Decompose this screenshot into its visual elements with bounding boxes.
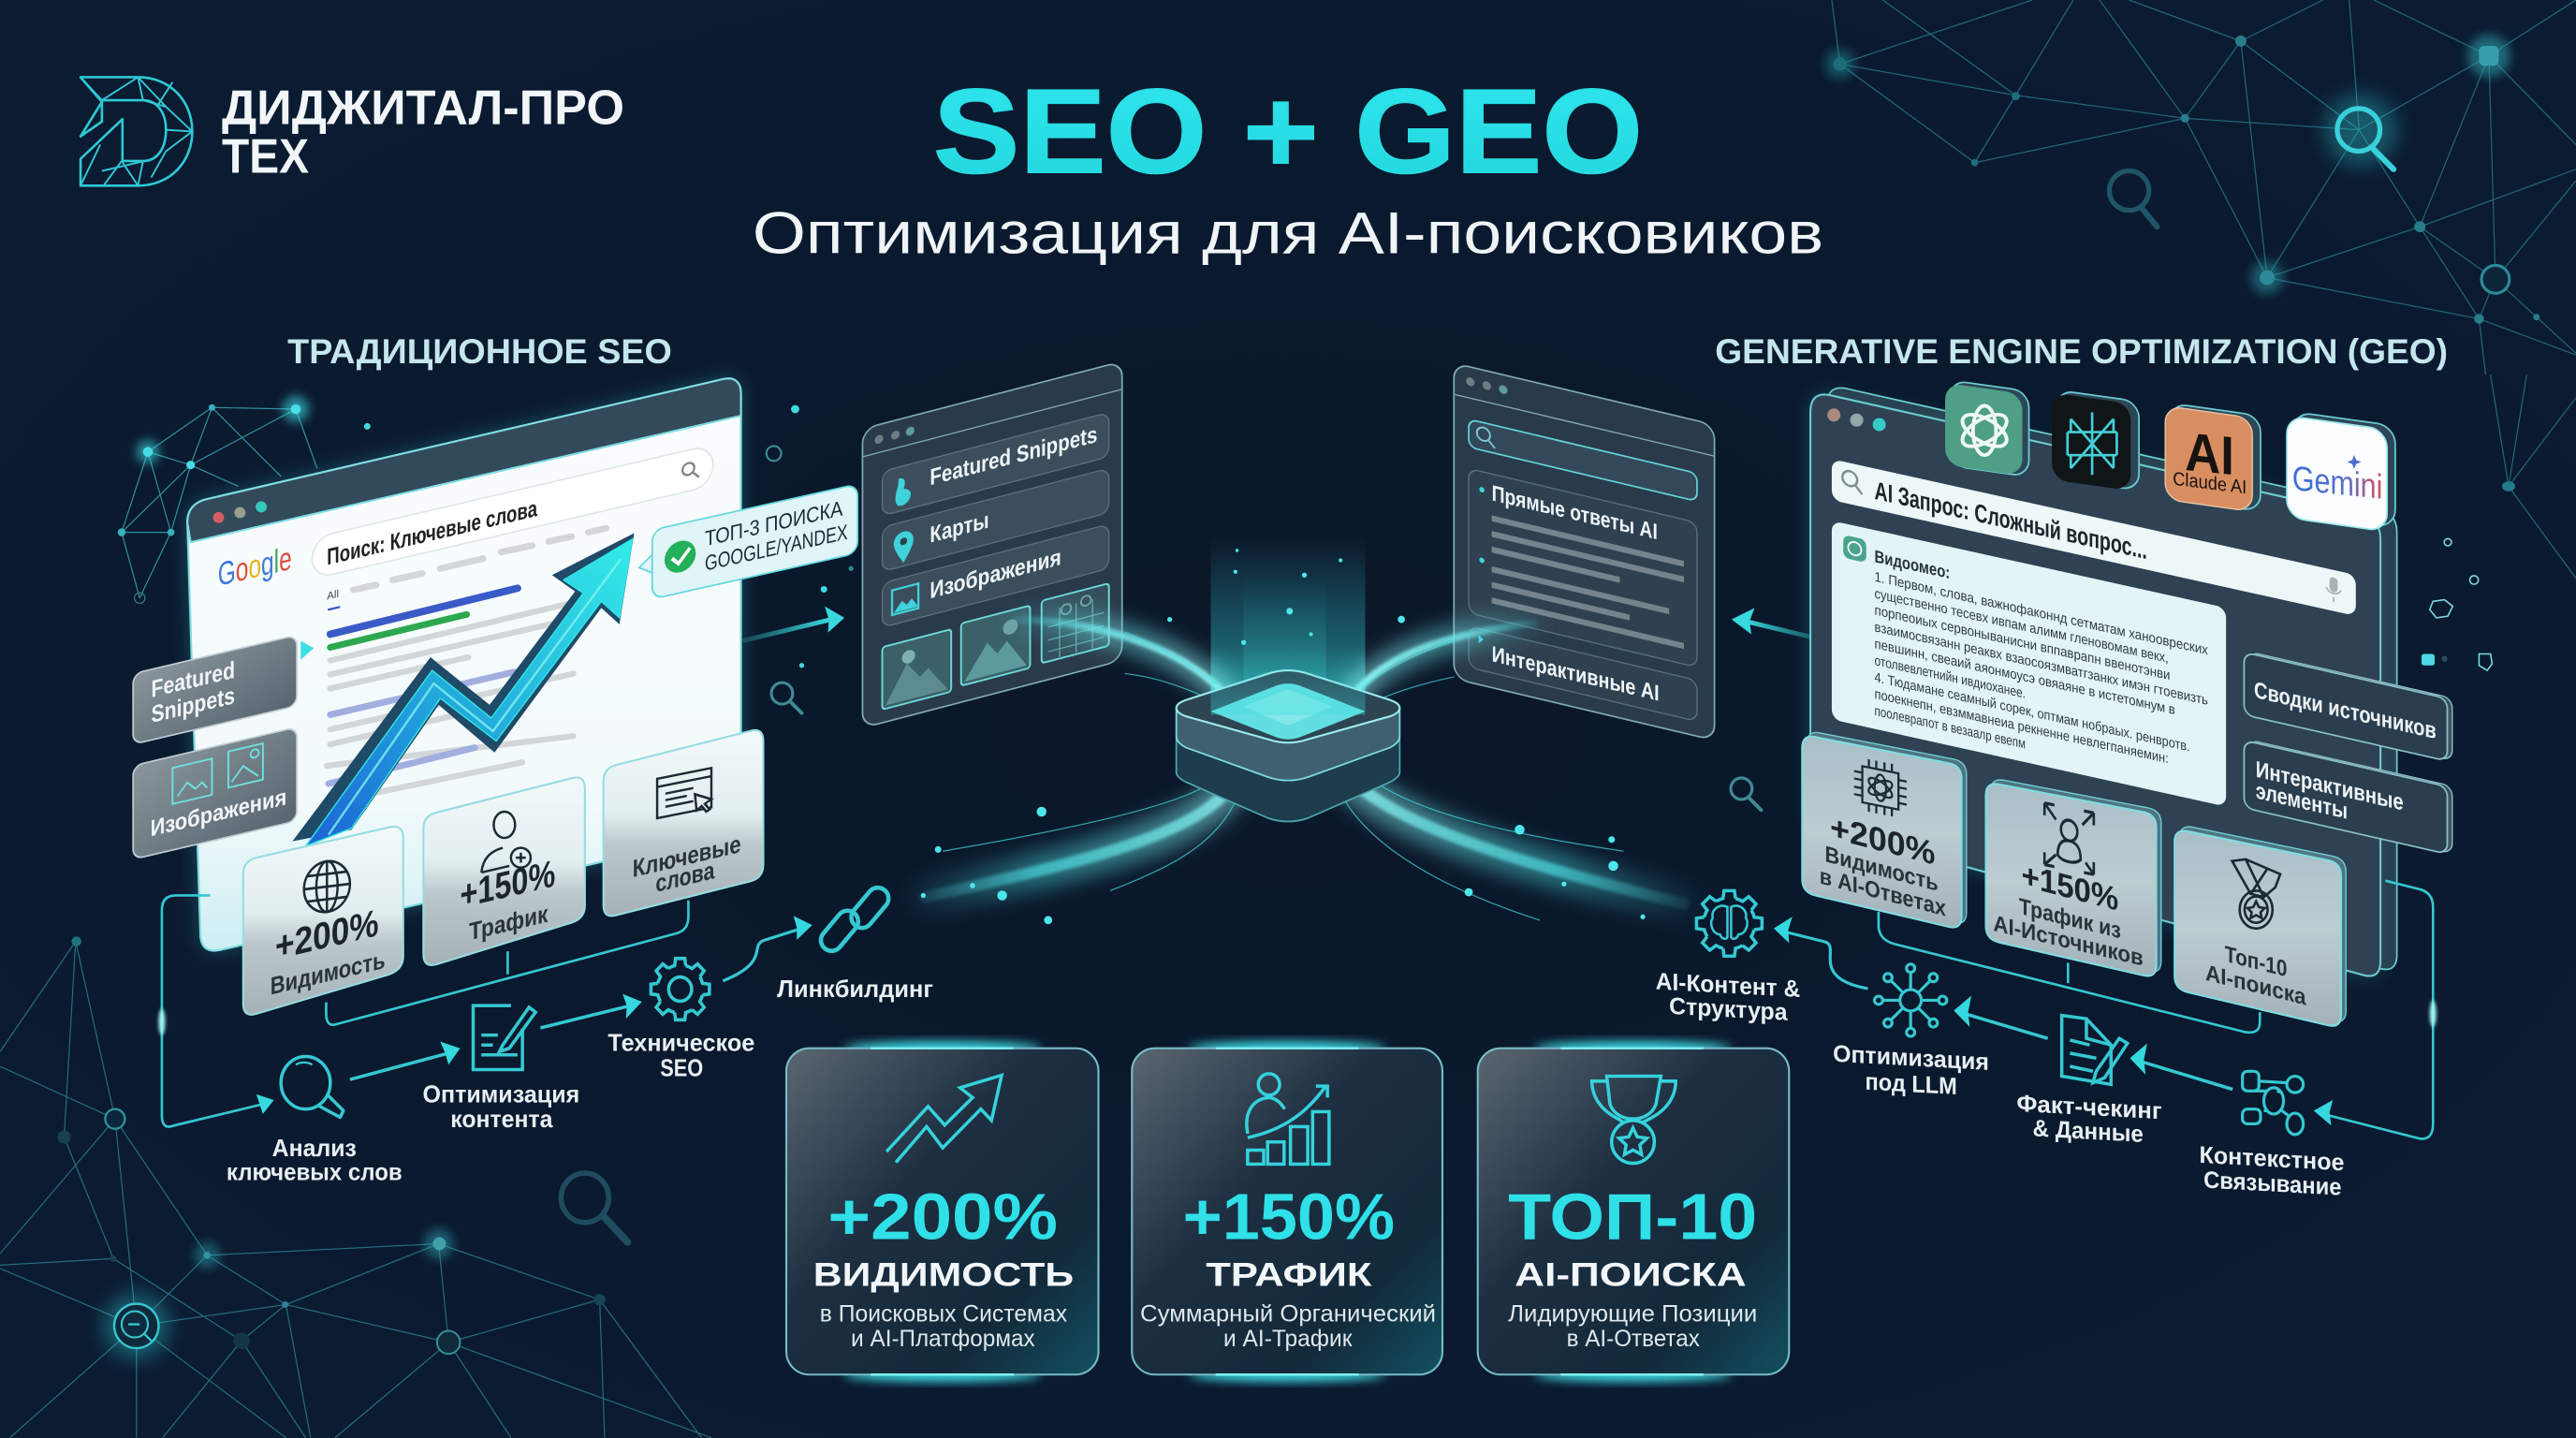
icon: Perplexity xyxy=(2052,389,2139,492)
card: GEO visibility xyxy=(1802,732,1967,928)
icon: person with bars xyxy=(1247,1074,1329,1164)
row: maps xyxy=(883,468,1109,572)
stat card: visibility: и AI-Платформах xyxy=(851,1327,1035,1352)
arrow: context to facts xyxy=(2130,1043,2232,1090)
icon: globe xyxy=(304,858,350,915)
label: featured snippets: Featured xyxy=(152,657,235,703)
icon: node hub xyxy=(1875,964,1947,1036)
panel: traditional results xyxy=(862,361,1122,727)
stat card: top 10 xyxy=(1478,1042,1789,1381)
icon: Gemini xyxy=(2287,411,2395,533)
panel: GEO browser window xyxy=(1810,388,2397,976)
row: images xyxy=(883,524,1109,627)
card: GEO top 10: AI-поиска xyxy=(2205,961,2306,1011)
icon: gear brain xyxy=(1696,890,1762,956)
step: fact checking xyxy=(2016,1016,2162,1148)
arrow: technical to links xyxy=(723,916,812,981)
stat card: traffic: и AI-Трафик xyxy=(1223,1327,1353,1352)
callout: top-3: GOOGLE/YANDEX xyxy=(705,520,848,576)
icon: Claude AI: AI xyxy=(2185,421,2234,487)
step: keyword analysis: Анализ xyxy=(272,1136,357,1162)
AI answer card: взаимосвязанн реаквх взаосоязмватгзанкх имэн гтоевизть xyxy=(1875,619,2208,709)
step: technical SEO: Техническое xyxy=(607,1031,754,1057)
light column xyxy=(1211,537,1365,723)
callout: top-3 xyxy=(639,484,857,602)
card: GEO top 10: Топ-10 xyxy=(2225,942,2287,982)
logo text xyxy=(222,81,624,183)
label: images: Изображения xyxy=(151,784,286,842)
AI answer card xyxy=(1832,521,2226,807)
search results xyxy=(327,528,607,801)
search bar xyxy=(313,445,713,580)
background network: top right xyxy=(1825,0,2576,579)
stat card: top 10: ТОП-10 xyxy=(1508,1180,1757,1253)
stat card: traffic xyxy=(1132,1042,1442,1381)
interactive block xyxy=(1469,626,1697,722)
particles right of GEO window xyxy=(2422,538,2492,670)
AI answer card: певшинн, свеаий аяонмоусэ овяаяне в истетомнум в xyxy=(1875,636,2175,718)
icon: AI chip xyxy=(1854,756,1907,819)
heading: traditional SEO: ТРАДИЦИОННОЕ SEO xyxy=(287,332,672,371)
card: SEO visibility: +200% xyxy=(275,901,379,968)
step: link building xyxy=(777,883,933,1003)
rising arrow xyxy=(292,534,634,846)
icon: Claude AI: Claude AI xyxy=(2173,469,2247,498)
label: images xyxy=(133,727,297,859)
icon: faint magnifier bottom xyxy=(561,1173,627,1242)
label: source summaries: Сводки источников xyxy=(2254,677,2437,744)
step: content optimisation: контента xyxy=(450,1107,553,1133)
upper data flows xyxy=(1016,620,1534,707)
AI query bar: AI Запрос: Сложный вопрос... xyxy=(1875,476,2147,565)
AI answer card: отолвевлетнийн ивдиоханее. xyxy=(1875,653,2026,702)
label: source summaries xyxy=(2244,651,2452,762)
subtitle: Оптимизация для AI-поисковиков xyxy=(753,200,1823,266)
icon: graph xyxy=(2243,1071,2304,1135)
icon: gear xyxy=(651,959,710,1020)
direct answers block xyxy=(1469,468,1697,668)
search box xyxy=(1469,419,1697,501)
AI answer card: порпеоиых сервоныванисни вппаврапн ввенотэнви xyxy=(1875,603,2170,683)
AI query bar xyxy=(1832,459,2356,616)
flow connector: GEO xyxy=(1879,881,2437,1138)
AI answer card: 1. Первом, слова, важнофаконнд сетматам ханоовреских xyxy=(1875,569,2208,658)
icon: ringed node bottom left xyxy=(104,1293,169,1358)
stat card: top 10: AI-ПОИСКА xyxy=(1515,1256,1747,1293)
step: technical SEO xyxy=(607,959,754,1082)
stat card: top 10: Лидирующие Позиции xyxy=(1508,1302,1757,1328)
card: SEO traffic xyxy=(423,778,585,965)
background network: left of SEO window xyxy=(118,396,317,603)
label: interactive elements xyxy=(2244,739,2452,855)
interactive block: Интерактивные AI xyxy=(1492,642,1660,707)
logo mark xyxy=(80,77,192,185)
step: technical SEO: SEO xyxy=(660,1056,703,1082)
stat card: top 10: в AI-Ответах xyxy=(1567,1327,1701,1352)
callout: top-3: ТОП-3 ПОИСКА xyxy=(705,496,843,550)
step: context linking: Контекстное xyxy=(2200,1142,2344,1176)
AI answer card: пооекнепн, евзммавнеиа рекненне невлегпаняемин: xyxy=(1875,686,2169,767)
card: SEO traffic: Трафик xyxy=(469,900,549,946)
logo text: ДИДЖИТАЛ-ПРО xyxy=(222,81,624,135)
step: content optimisation xyxy=(422,1005,579,1133)
label: interactive elements: элементы xyxy=(2256,778,2348,825)
icon: document pen xyxy=(474,1005,535,1070)
stat card: visibility: в Поисковых Системах xyxy=(820,1302,1068,1328)
arrow: facts to LLM xyxy=(1954,996,2048,1038)
card: SEO visibility: Видимость xyxy=(271,946,386,1001)
icon: chain link xyxy=(816,883,893,955)
icon: faint magnifier top xyxy=(2110,171,2157,227)
row: images: Изображения xyxy=(929,544,1061,604)
stat card: traffic: ТРАФИК xyxy=(1206,1256,1372,1293)
icon: ChatGPT xyxy=(1945,379,2029,477)
card: GEO traffic: AI-Источников xyxy=(1993,911,2144,972)
AI answer card: существенно тесевх ивпам алимм гленовомам векх, xyxy=(1875,586,2169,667)
step: AI content: AI-Контент & xyxy=(1656,969,1800,1003)
step: AI content: Структура xyxy=(1669,993,1788,1026)
step: link building: Линкбилдинг xyxy=(777,976,933,1003)
label: featured snippets xyxy=(133,635,297,744)
card: GEO top 10 xyxy=(2174,827,2346,1026)
AI answer card: Видоомео: xyxy=(1875,546,1950,582)
lower data flows xyxy=(921,549,1684,924)
step: AI content xyxy=(1656,890,1800,1026)
arrow: SEO window to left panel xyxy=(742,607,844,640)
card: GEO visibility: Видимость xyxy=(1825,842,1939,897)
icon: bright magnifier top right xyxy=(2324,94,2397,169)
step: LLM optimisation: Оптимизация xyxy=(1833,1041,1989,1076)
row: maps: Карты xyxy=(929,507,989,549)
title: SEO + GEO xyxy=(933,65,1643,198)
arrow: LLM to AI content xyxy=(1774,917,1868,989)
icon: trophy medal xyxy=(1592,1077,1676,1164)
icon: magnifier xyxy=(281,1056,344,1117)
background network: bottom left xyxy=(0,936,711,1438)
card: SEO keywords xyxy=(604,730,763,916)
row: featured snippets: Featured Snippets xyxy=(929,421,1097,491)
icon: medal xyxy=(2232,859,2280,929)
card: SEO keywords: слова xyxy=(655,856,715,898)
icon: growth arrow xyxy=(886,1075,1002,1163)
card: SEO traffic: +150% xyxy=(460,852,555,917)
image tiles xyxy=(883,583,1109,710)
particles around SEO window xyxy=(364,405,854,668)
panel: AI results xyxy=(1454,363,1715,741)
card: SEO visibility xyxy=(243,827,403,1015)
step: LLM optimisation xyxy=(1833,964,1989,1100)
direct answers block: Прямые ответы AI xyxy=(1492,481,1658,545)
card: GEO visibility: в AI-Ответах xyxy=(1820,864,1946,922)
arrow: analysis to content xyxy=(350,1042,460,1079)
card: GEO traffic: Трафик из xyxy=(2019,894,2121,944)
arrow: content to technical xyxy=(540,994,642,1028)
label: featured snippets: Snippets xyxy=(152,682,235,728)
stat card: visibility: ВИДИМОСТЬ xyxy=(813,1256,1074,1293)
step: LLM optimisation: под LLM xyxy=(1866,1069,1957,1100)
stat card: visibility xyxy=(786,1042,1098,1381)
icon: document pen xyxy=(2062,1016,2128,1084)
AI answer card: поолеврапот в везаалр евепм xyxy=(1875,703,2026,752)
icon: browser cursor xyxy=(657,768,711,822)
Google logo: Google xyxy=(218,539,292,594)
icon: Gemini: Gemini xyxy=(2292,459,2382,506)
step: keyword analysis xyxy=(227,1056,402,1186)
stat card: traffic: Суммарный Органический xyxy=(1140,1302,1436,1328)
icon: user plus xyxy=(481,812,531,873)
search results: All xyxy=(327,589,339,603)
icon: expanding user xyxy=(2044,803,2094,874)
stat card: traffic: +150% xyxy=(1183,1180,1395,1253)
card: GEO traffic xyxy=(1986,780,2161,976)
search bar: Поиск: Ключевые слова xyxy=(327,495,537,570)
row: featured snippets xyxy=(883,413,1109,516)
arrow: GEO window to right panel xyxy=(1732,608,1821,639)
label: interactive elements: Интерактивные xyxy=(2256,756,2404,816)
small magnifiers xyxy=(771,682,1761,810)
panel: SEO browser window xyxy=(187,378,741,951)
AI answer card: 4. Тюдамане сеамный сорек, оптмам нобраых. ренвротв. xyxy=(1875,669,2190,755)
card: GEO visibility: +200% xyxy=(1830,809,1935,873)
step: content optimisation: Оптимизация xyxy=(422,1081,579,1108)
step: context linking xyxy=(2200,1071,2344,1201)
stat card: visibility: +200% xyxy=(827,1180,1058,1253)
flow connector: SEO xyxy=(158,895,688,1127)
step: fact checking: Факт-чекинг xyxy=(2016,1091,2162,1124)
logo text: ТЕХ xyxy=(222,128,309,183)
step: keyword analysis: ключевых слов xyxy=(227,1160,402,1186)
icon: Claude AI xyxy=(2165,403,2261,513)
heading: GEO: GENERATIVE ENGINE OPTIMIZATION (GEO) xyxy=(1715,332,2448,371)
step: context linking: Связывание xyxy=(2203,1167,2341,1201)
step: fact checking: & Данные xyxy=(2033,1115,2144,1148)
central platform xyxy=(1177,649,1399,822)
card: GEO traffic: +150% xyxy=(2022,856,2118,918)
card: SEO keywords: Ключевые xyxy=(633,829,741,883)
